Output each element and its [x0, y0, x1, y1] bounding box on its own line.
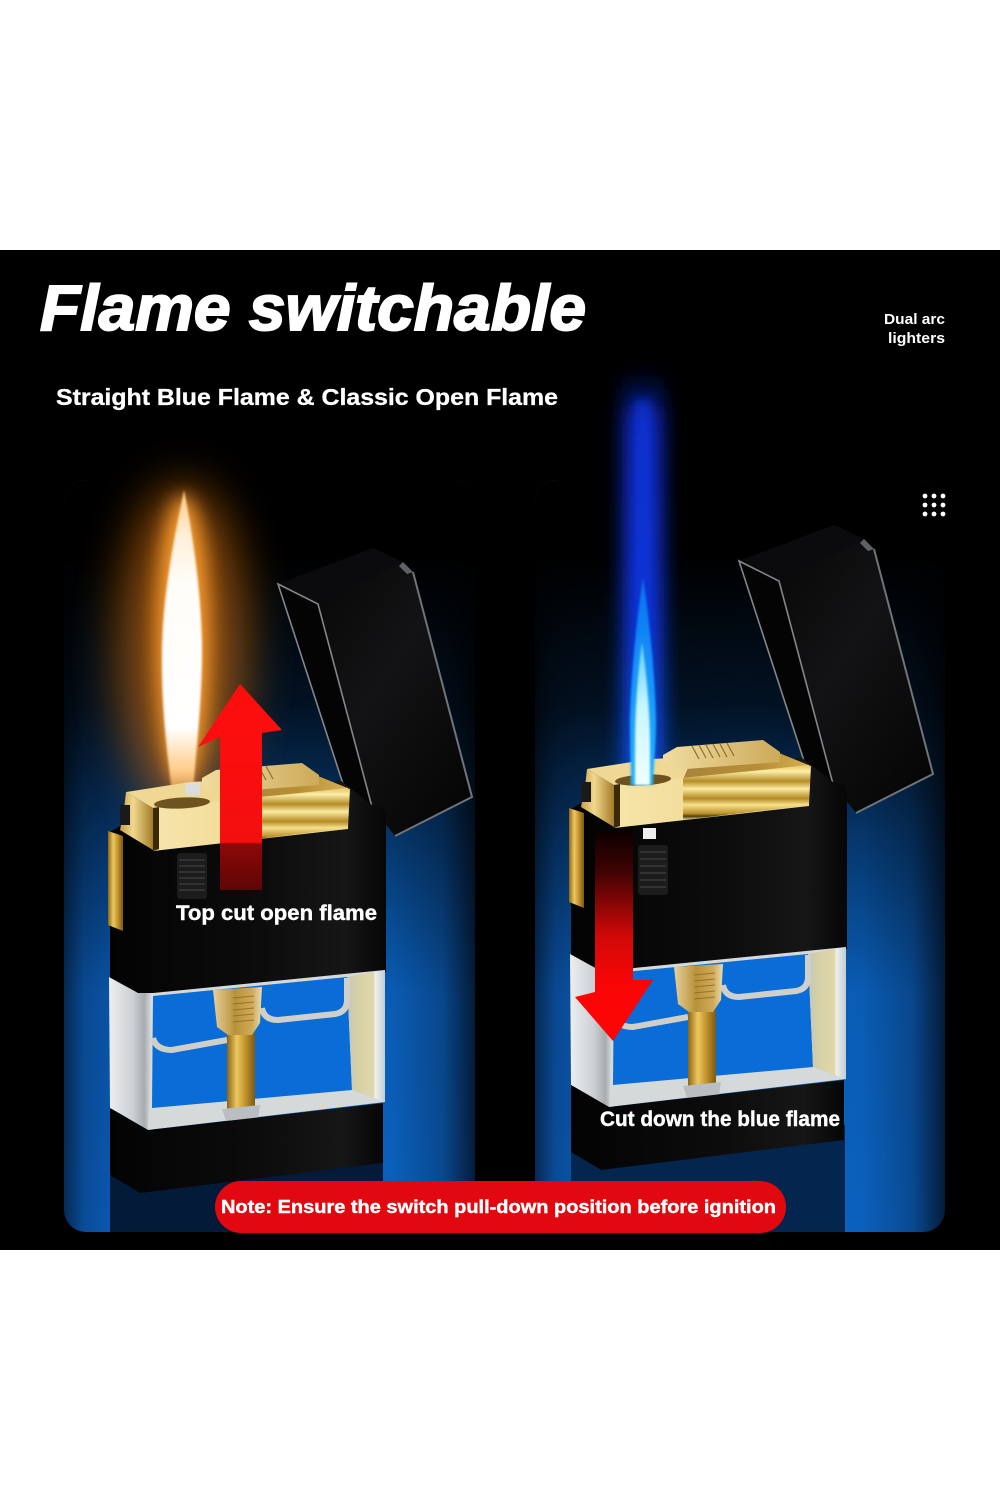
background [0, 250, 1000, 1250]
left reflection [110, 1150, 383, 1232]
label: blue flame: Cut down the blue flame [600, 1108, 840, 1131]
left thumb switch [177, 853, 207, 899]
blue flame cone [630, 578, 656, 785]
title: Flame switchable [40, 273, 586, 344]
subtitle: Straight Blue Flame & Classic Open Flame [56, 384, 558, 410]
brand label: lighters [888, 331, 945, 347]
panel: right backdrop [535, 480, 945, 1232]
right thumb switch [638, 845, 668, 895]
lighter: right [569, 525, 933, 1170]
note pill: Note: Ensure the switch pull-down position before ignition [221, 1197, 776, 1217]
panel: left backdrop [64, 480, 475, 1232]
arrow: up [198, 684, 282, 890]
label: open flame: Top cut open flame [176, 902, 377, 925]
lighter: left [108, 548, 472, 1193]
open flame [121, 485, 245, 815]
arrow: down [575, 828, 653, 1041]
note pill [215, 1181, 786, 1233]
right reflection [571, 1125, 845, 1232]
left top button [185, 782, 200, 796]
blue beam [622, 370, 664, 790]
brand label [884, 312, 945, 347]
switch indicator [643, 828, 656, 839]
brand label: Dual arc [884, 312, 945, 328]
icon: dot grid [923, 494, 945, 516]
